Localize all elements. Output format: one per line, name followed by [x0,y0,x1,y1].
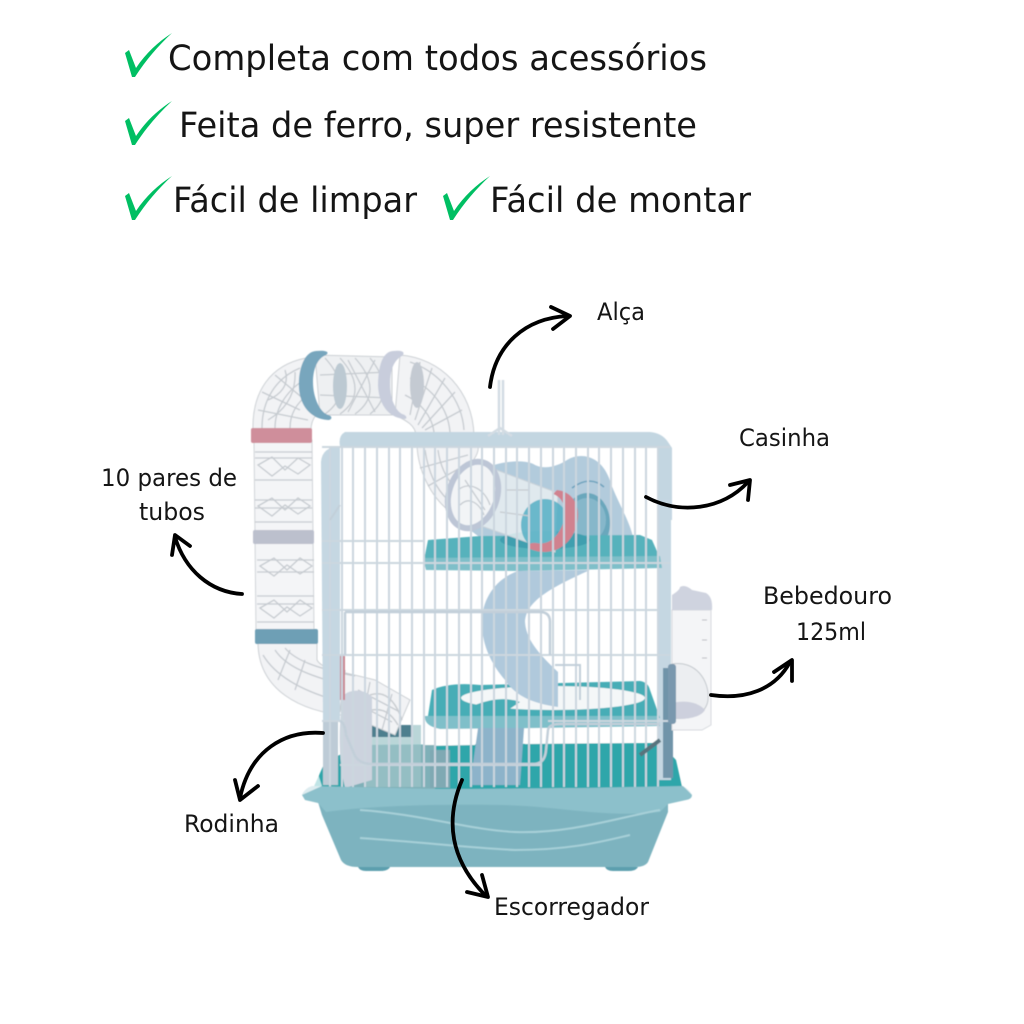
upper shelf [423,531,662,571]
escorregador: slide [470,570,590,785]
arrow: handle [490,307,570,387]
top right tube bend [395,355,474,436]
label: tubes: tubos [139,498,205,526]
feature: easy assembly: Fácil de montar [490,181,752,221]
white floor gap [425,728,660,746]
arrow: wheel [235,733,323,800]
tray [302,745,692,871]
icon: check 2 [125,101,172,145]
top straight tube [315,355,392,415]
label: bottle: Bebedouro [763,582,892,610]
arrow: bottle [711,660,792,696]
bebedouro: water bottle [640,586,712,755]
left vertical tube [254,440,314,632]
lower glass box [345,725,450,789]
label: handle: Alça [597,298,645,326]
frame [321,432,673,785]
feature: iron: Feita de ferro, super resistente [179,106,697,146]
tray interior [310,743,684,795]
arrow: little house [646,480,750,508]
lower right tube bend [417,445,478,510]
arrow: slide [453,780,488,897]
label: little house: Casinha [739,424,830,452]
label: tubes: 10 pares de [101,464,237,492]
label: wheel: Rodinha [184,810,279,838]
icon: check 3 [125,176,172,220]
house tube with pink ring [440,455,578,552]
top left tube bend [253,358,316,430]
wire grid [322,447,670,787]
icon: check 4 [443,176,490,220]
label: bottle: 125ml [796,618,866,646]
feature: complete: Completa com todos acessórios [168,39,707,79]
icon: check 1 [125,33,172,77]
label: bottle [763,582,892,646]
handle [488,380,512,436]
hamster cage illustration [251,351,712,871]
arrow: tubes [172,535,242,594]
tube rings [251,351,479,644]
feature: easy clean: Fácil de limpar [173,181,418,221]
label: slide: Escorregador [494,893,649,921]
label: tubes [101,464,237,526]
bottom tube elbow [258,642,410,735]
feature list [125,33,752,221]
casinha: little house [470,456,634,553]
middle shelf [425,681,660,729]
wheel [340,655,402,788]
